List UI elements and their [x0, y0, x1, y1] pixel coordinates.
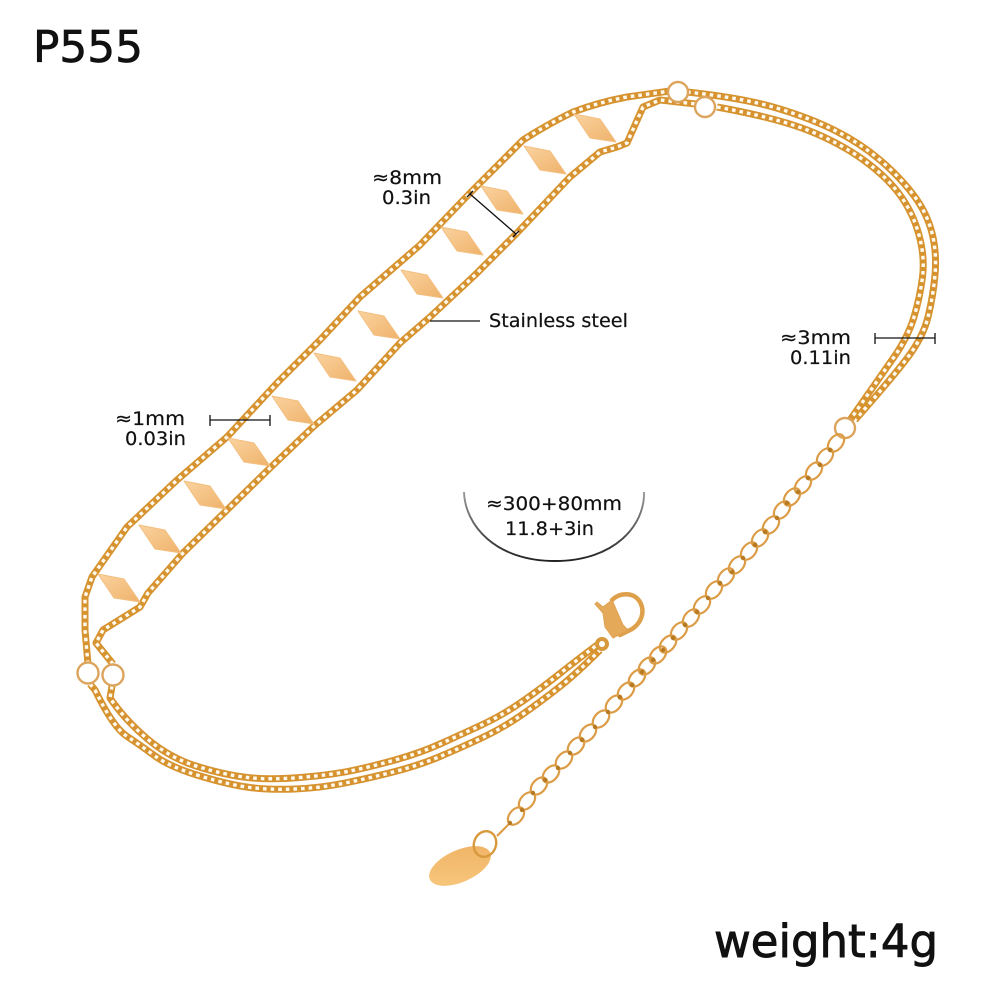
measure: chain width 3mm: ≈3mm: [780, 327, 851, 349]
measure: band width 8mm: ≈8mm: [372, 167, 442, 189]
weight label: weight:4g: [714, 915, 938, 968]
upper ladder chain: [85, 90, 677, 664]
extender chain: [497, 431, 847, 836]
length label with arc: [464, 492, 644, 561]
jump rings: [78, 82, 855, 686]
measure: chain width 1mm: [115, 408, 270, 450]
length label with arc: ≈300+80mm: [486, 493, 622, 515]
necklace illustration: [78, 82, 936, 894]
length label with arc: 11.8+3in: [505, 518, 594, 540]
oval tag: [423, 838, 497, 894]
right double chain: [687, 92, 936, 420]
extender link joints: [508, 448, 832, 825]
bottom double chain: [90, 645, 600, 789]
measure: chain width 3mm: 0.11in: [790, 347, 851, 369]
diamond charms: [98, 114, 616, 602]
tag ring: [470, 828, 500, 860]
measure: band width 8mm: [372, 167, 519, 237]
lobster clasp: [595, 594, 642, 649]
material label: Stainless steel: [489, 310, 628, 332]
measure: band width 8mm: 0.3in: [382, 187, 431, 209]
measure: chain width 1mm: ≈1mm: [115, 408, 185, 430]
title: product code: P555: [33, 22, 143, 73]
lower ladder chain: [96, 100, 696, 664]
measure: chain width 1mm: 0.03in: [125, 428, 186, 450]
measure: chain width 3mm: [780, 327, 935, 369]
